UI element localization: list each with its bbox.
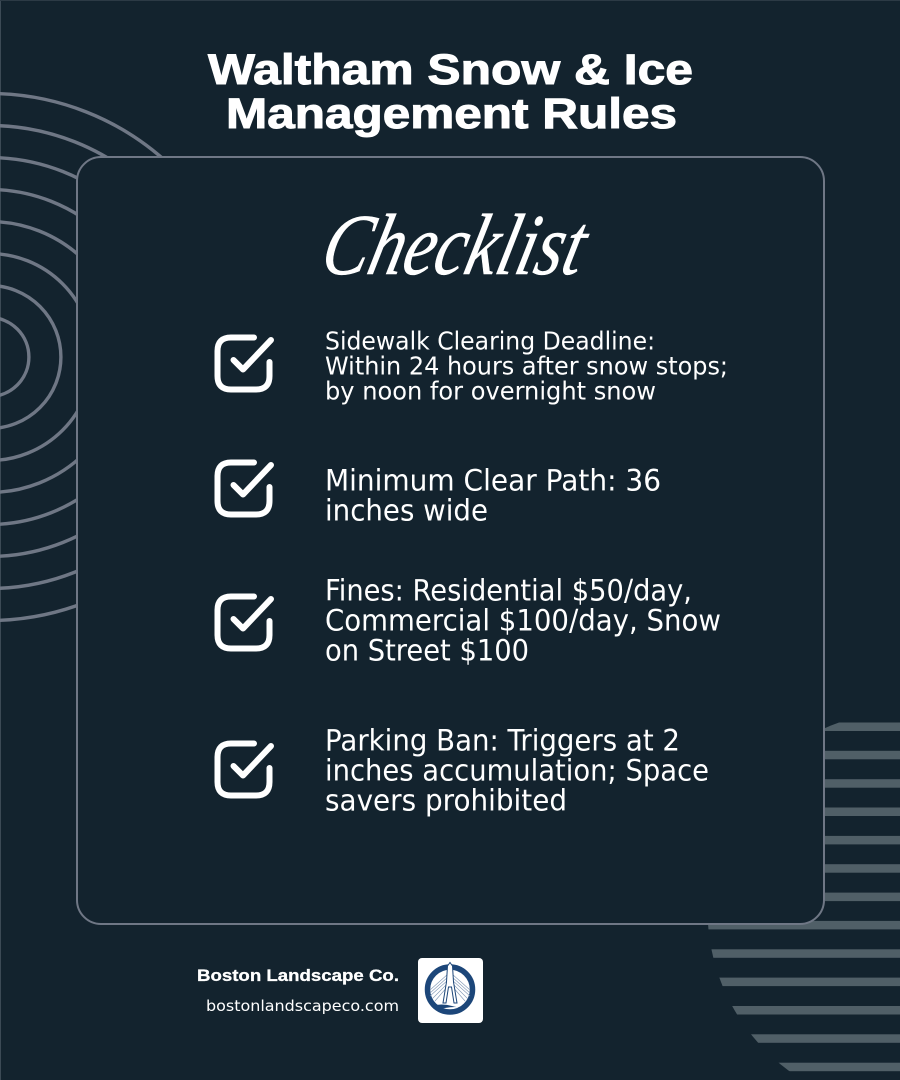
panel: checklist card <box>77 157 824 924</box>
icon: checkbox <box>218 744 271 796</box>
decorative concentric rings <box>0 94 253 620</box>
checklist item: parking ban <box>218 724 709 818</box>
icon: checkbox <box>218 596 271 648</box>
icon: checkbox <box>218 462 271 514</box>
title <box>208 46 693 138</box>
checklist item: parking ban: Parking Ban: Triggers at 2 <box>325 724 680 758</box>
checklist item: sidewalk clearing deadline <box>218 326 728 406</box>
footer website: bostonlandscapeco.com <box>206 997 399 1015</box>
checklist item: minimum clear path <box>218 462 661 528</box>
checklist item: fines: Commercial $100/day, Snow <box>325 604 721 638</box>
title: Waltham Snow & Ice <box>208 46 693 94</box>
decorative striped circle <box>700 722 900 1071</box>
title: Management Rules <box>226 90 677 138</box>
icon: checkbox <box>218 338 271 390</box>
footer company name: Boston Landscape Co. <box>197 966 399 985</box>
checklist item: fines: on Street $100 <box>325 634 529 668</box>
checklist item: parking ban: savers prohibited <box>325 784 567 818</box>
checklist item: fines: Fines: Residential $50/day, <box>325 574 692 608</box>
checklist item: sidewalk clearing deadline: Sidewalk Clearing Deadline: <box>325 326 655 356</box>
icon: company logo <box>418 958 483 1023</box>
checklist item: sidewalk clearing deadline: Within 24 hours after snow stops; <box>325 352 728 380</box>
checklist item: minimum clear path: Minimum Clear Path: 36 <box>325 464 661 498</box>
checklist item: sidewalk clearing deadline: by noon for overnight snow <box>325 376 656 406</box>
checklist item: minimum clear path: inches wide <box>325 494 488 528</box>
checklist item: parking ban: inches accumulation; Space <box>325 754 709 788</box>
checklist item: fines <box>218 574 721 668</box>
heading: Checklist: Checklist <box>313 197 599 294</box>
logo tower <box>443 962 457 1003</box>
